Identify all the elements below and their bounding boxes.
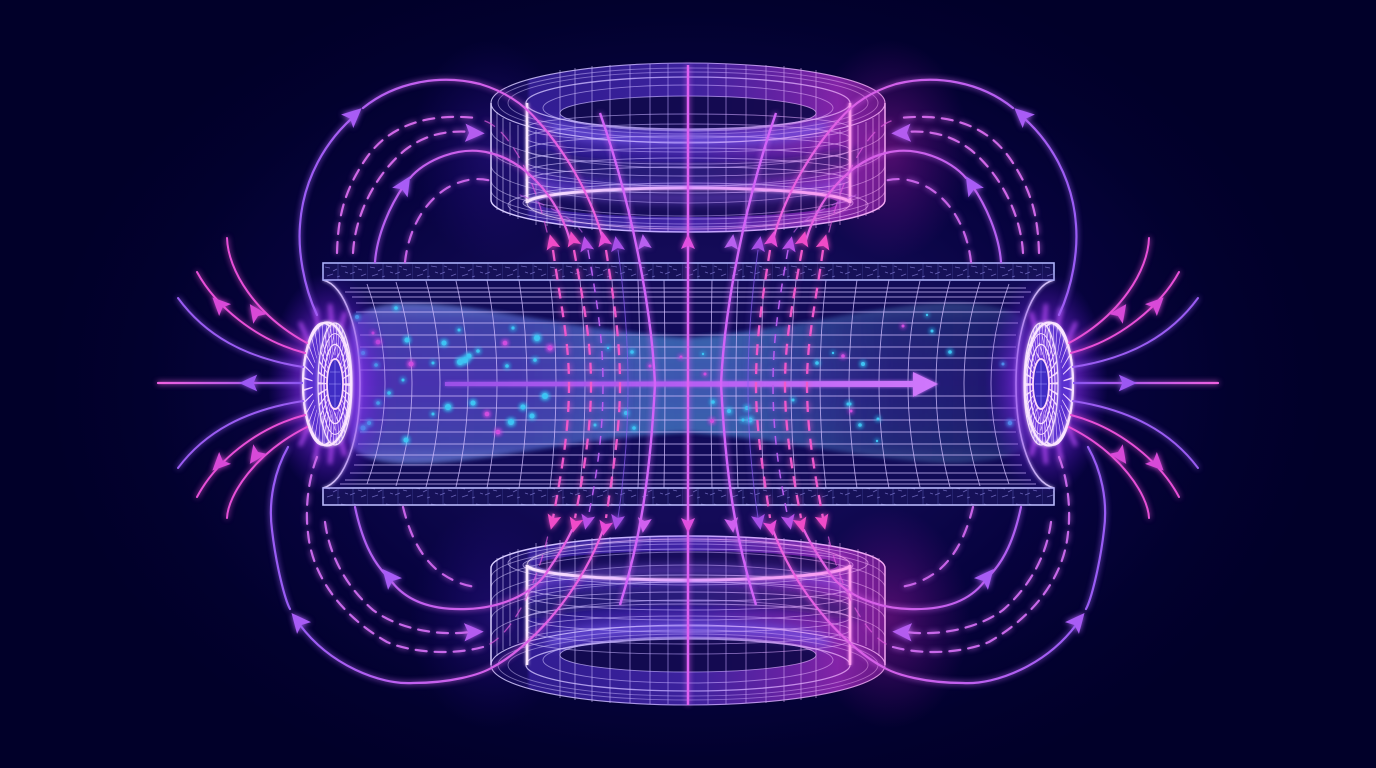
bottom magnet coil	[491, 536, 885, 705]
field lines: upper right	[773, 80, 1076, 315]
field lines: lower left	[271, 447, 603, 683]
main axis arrow	[445, 372, 938, 397]
field lines: upper left	[300, 80, 603, 315]
field lines: all	[158, 65, 1218, 705]
field lines: right port	[1069, 238, 1218, 518]
central field lines right	[721, 113, 833, 605]
tube grid	[340, 280, 1036, 488]
central axis field line	[681, 65, 695, 705]
vacuum chamber tube	[323, 280, 1054, 488]
left port ring	[268, 272, 392, 496]
right port ring	[984, 272, 1108, 496]
top magnet coil	[491, 63, 885, 232]
tube end outlines	[323, 280, 1054, 488]
plasma particles	[355, 306, 1012, 442]
field lines: left port	[158, 238, 307, 518]
bottom plate	[323, 488, 1054, 505]
plasma column	[350, 303, 1030, 463]
central field lines left	[543, 113, 655, 605]
diagram: magnetic field chamber	[152, 28, 1224, 742]
top plate	[323, 263, 1054, 280]
field lines: lower right	[773, 447, 1105, 683]
glow: behind magnets	[410, 40, 970, 728]
